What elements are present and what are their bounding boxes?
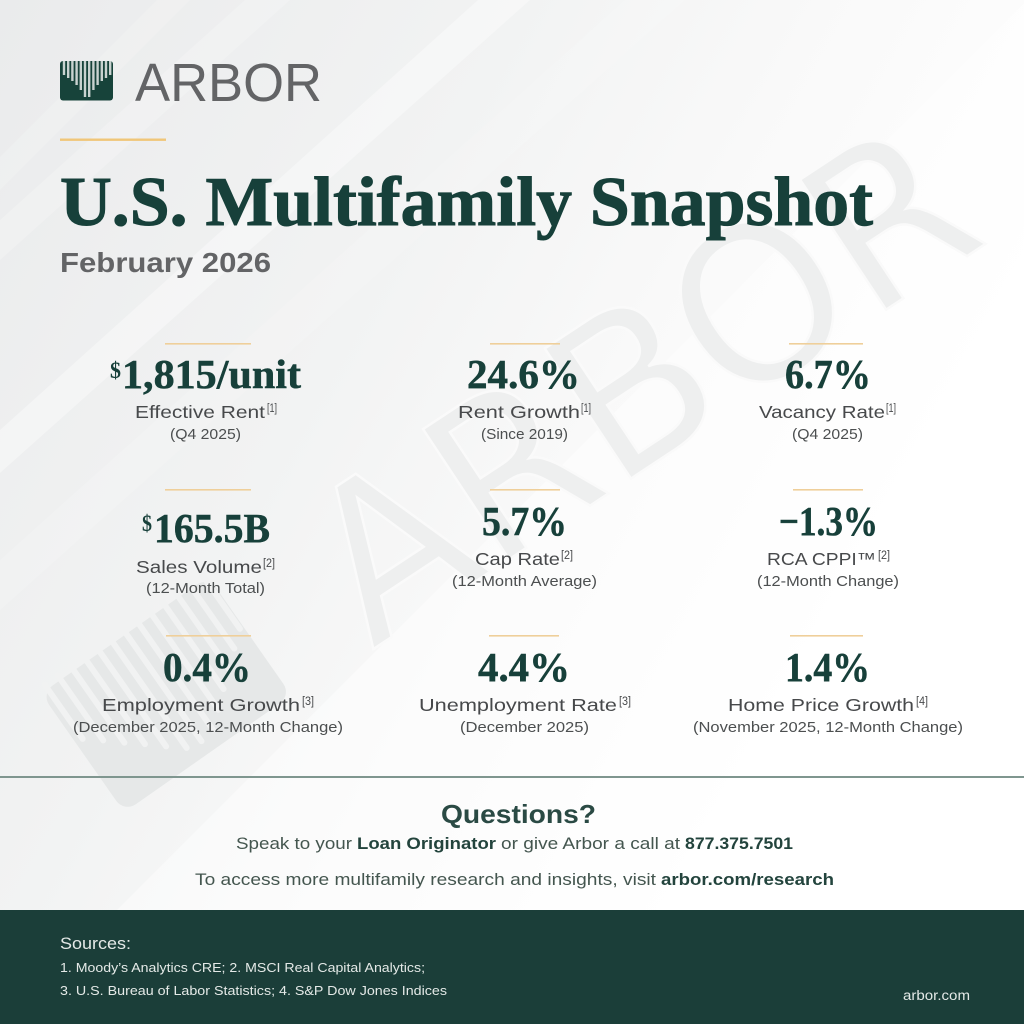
stat: unemployment rate: 4.4%	[478, 644, 570, 690]
divider	[0, 776, 1024, 778]
subtitle: February 2026	[60, 247, 271, 278]
stat: rent growth: [1]	[581, 403, 591, 415]
stat: sales volume: 165.5B	[154, 505, 270, 551]
stat: vacancy rate: [1]	[886, 403, 896, 415]
stat: sales volume: (12-Month Total)	[146, 581, 265, 597]
stat: effective rent: [1]	[267, 403, 277, 415]
stat: effective rent: (Q4 2025)	[170, 427, 241, 443]
watermark: ARBOR wordmark: ARBOR	[263, 75, 1019, 693]
stat: home price growth	[693, 635, 963, 736]
stat: employment growth: 0.4%	[163, 644, 251, 690]
stat: employment growth: [3]	[302, 696, 314, 708]
website: arbor.com	[903, 988, 970, 1003]
stat: cap rate: Cap Rate	[475, 549, 560, 569]
contact line: Speak to your	[236, 835, 353, 853]
stat: unemployment rate: [3]	[619, 696, 631, 708]
stat: RCA CPPI: RCA CPPI™	[767, 549, 876, 569]
title: U.S. Multifamily Snapshot	[60, 164, 873, 241]
stat: effective rent: $	[110, 358, 121, 383]
stat: unemployment rate: (December 2025)	[460, 720, 589, 736]
stat: employment growth	[73, 635, 343, 736]
stat: unemployment rate	[419, 635, 631, 736]
stat: home price growth: Home Price Growth	[728, 695, 914, 715]
stat: home price growth: [4]	[916, 696, 928, 708]
stat: sales volume: $	[142, 511, 152, 536]
stat: RCA CPPI: (12-Month Change)	[757, 574, 899, 590]
stat: vacancy rate	[759, 343, 896, 443]
research line	[195, 871, 834, 889]
sources list	[60, 960, 448, 998]
stat: RCA CPPI: [2]	[878, 550, 890, 562]
stat: effective rent: 1,815/unit	[122, 351, 301, 397]
stat: sales volume: [2]	[263, 558, 275, 570]
sources heading: Sources:	[60, 935, 131, 953]
stat: vacancy rate: 6.7%	[785, 351, 871, 397]
watermark: logo mark	[37, 570, 291, 812]
stat: RCA CPPI: −1.3%	[779, 498, 878, 544]
stat: rent growth: Rent Growth	[458, 402, 580, 422]
stat: employment growth: (December 2025, 12-Month Change)	[73, 720, 343, 736]
footer band	[0, 910, 1024, 1024]
stat: cap rate: 5.7%	[482, 498, 567, 544]
stat: vacancy rate: (Q4 2025)	[792, 427, 863, 443]
icon: Arbor logo mark	[60, 61, 113, 100]
stat: employment growth: Employment Growth	[102, 695, 300, 715]
contact line: or give Arbor a call at	[501, 835, 680, 853]
stat: rent growth: (Since 2019)	[481, 427, 568, 443]
stat: cap rate: (12-Month Average)	[452, 574, 597, 590]
contact line	[236, 835, 793, 853]
sources list: 1. Moody’s Analytics CRE; 2. MSCI Real Capital Analytics;	[60, 960, 425, 975]
contact line: Loan Originator	[357, 835, 497, 853]
stat: effective rent	[110, 343, 301, 443]
research line: To access more multifamily research and insights, visit	[195, 871, 656, 889]
stat: effective rent: Effective Rent	[135, 402, 265, 422]
research line: arbor.com/research	[661, 871, 834, 889]
stat: sales volume	[136, 489, 275, 597]
questions heading: Questions?	[441, 799, 596, 829]
stat: home price growth: 1.4%	[785, 644, 870, 690]
stat: RCA CPPI	[757, 489, 899, 590]
stat: home price growth: (November 2025, 12-Month Change)	[693, 720, 963, 736]
stat: cap rate: [2]	[561, 550, 573, 562]
contact line: 877.375.7501	[685, 835, 793, 853]
logo wordmark: ARBOR	[135, 53, 322, 113]
stat: vacancy rate: Vacancy Rate	[759, 402, 885, 422]
stat: rent growth: 24.6%	[467, 351, 580, 397]
stat: sales volume: Sales Volume	[136, 557, 262, 577]
stat: cap rate	[452, 489, 597, 590]
stat: unemployment rate: Unemployment Rate	[419, 695, 617, 715]
stat: rent growth	[458, 343, 591, 443]
accent rule	[60, 138, 166, 141]
sources list: 3. U.S. Bureau of Labor Statistics; 4. S&P Dow Jones Indices	[60, 983, 448, 998]
